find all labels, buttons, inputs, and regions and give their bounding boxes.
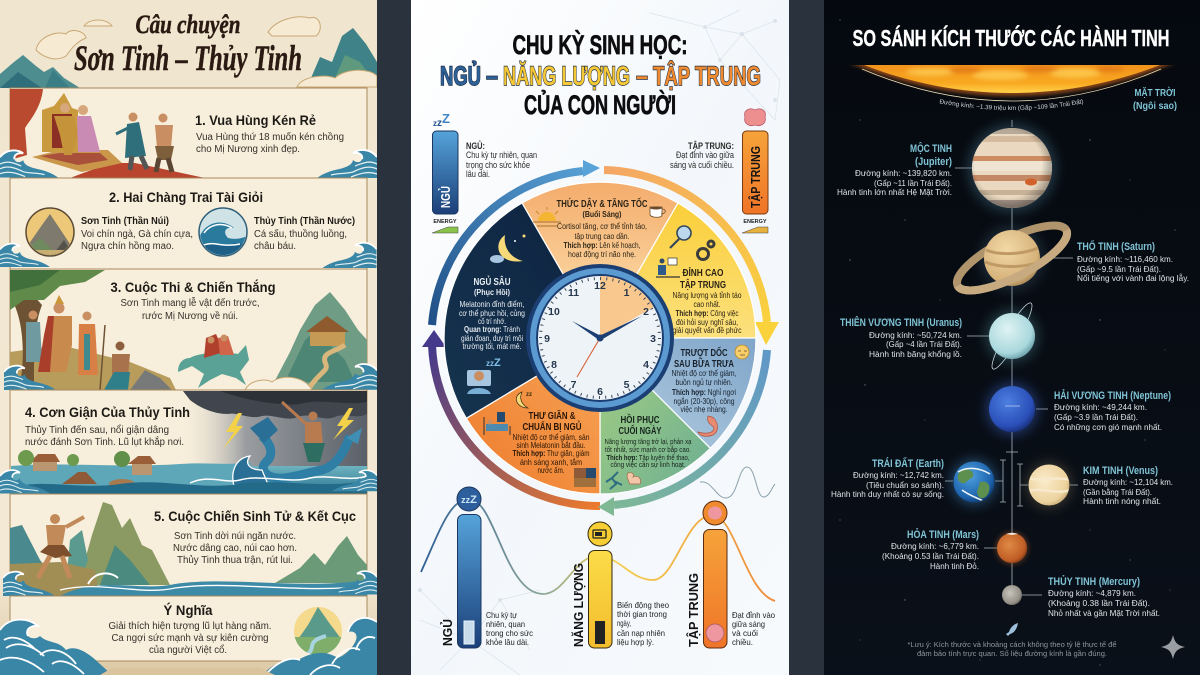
phase: afternoon dip: việc nhẹ nhàng. (680, 405, 728, 414)
vertical bar: NGỦ (432, 111, 458, 233)
sun: Đường kính: ~1.39 triệu km (Gấp ~109 lần Trái Đất) (940, 99, 1084, 112)
vertical bar: TẬP TRUNG: TẬP TRUNG (748, 146, 763, 208)
clock numbers: 6 (597, 386, 603, 398)
icon: coffee (650, 206, 665, 217)
text: Thủy Tinh: châu báu. (254, 241, 296, 252)
icon: stomach (698, 416, 717, 436)
phase: deep sleep: Quan trọng: Tránh (464, 325, 520, 334)
illustration: storm, flood and dragon (11, 391, 367, 494)
icon: bedside table (574, 468, 596, 487)
label: Mars: (Khoảng 0.53 lần Trái Đất). (882, 551, 979, 561)
title: Câu chuyện (136, 10, 240, 39)
title coloured line: – (636, 61, 648, 91)
label: Neptune: HẢI VƯƠNG TINH (Neptune) (1054, 389, 1171, 402)
column text (732, 610, 775, 647)
planet: Uranus (986, 300, 1038, 372)
label: Mercury: Đường kính: ~4,879 km. (1048, 588, 1136, 598)
stars (839, 19, 1176, 666)
label: Saturn: THỔ TINH (Saturn) (1077, 240, 1155, 253)
side note: TẬP TRUNG: TẬP TRUNG: (688, 140, 734, 151)
phase: afternoon dip: TRƯỢT DỐC (680, 345, 728, 359)
label: Jupiter: (Jupiter) (915, 156, 952, 168)
column: TẬP TRUNG: TẬP TRUNG (686, 573, 701, 647)
heading: 2. Hai Chàng Trai Tài Giỏi (109, 189, 263, 205)
row 4: Cơn Giận Của Thủy Tinh (0, 390, 377, 494)
clock numbers (544, 280, 656, 398)
clock numbers: 5 (624, 379, 630, 391)
column text: Đạt đỉnh vào (732, 610, 775, 620)
phase: deep sleep: (Phục Hồi) (474, 288, 510, 297)
icon: moon (490, 234, 526, 263)
phase: evening recovery (604, 413, 692, 469)
label: Jupiter: MỘC TINH (910, 142, 952, 155)
phase: wind down: THƯ GIÃN & (528, 409, 576, 422)
side note: NGỦ (466, 140, 537, 179)
side note: TẬP TRUNG (670, 140, 734, 170)
heading: Ý Nghĩa (164, 601, 213, 618)
cycle arrows ring (422, 160, 779, 516)
heading: 3. Cuộc Thi & Chiến Thắng (110, 278, 276, 295)
sine line top right of bottom row (700, 467, 775, 498)
clock hands (572, 316, 642, 377)
illustration: throne room (10, 89, 205, 178)
text: Sơn Tinh mang lễ vật đến trước, (120, 296, 260, 309)
title coloured line: TẬP TRUNG (653, 60, 761, 91)
icon: rocket (1006, 623, 1018, 636)
phase: evening recovery: tốt nhất, sức mạnh cơ bắp cao. (605, 445, 691, 454)
illustration: mountains and warrior (10, 502, 367, 596)
text: rước Mị Nương về núi. (142, 310, 238, 322)
vertical bar: NGỦ: zz (433, 118, 442, 129)
text: của người Việt cổ. (149, 644, 227, 656)
phase: morning: hoạt động trí não nhẹ. (568, 250, 636, 259)
phase: deep sleep: gián đoạn, duy trì môi (461, 334, 523, 343)
sun: MẶT TRỜI (1134, 86, 1176, 99)
label: Venus: Hành tinh nóng nhất. (1083, 496, 1161, 506)
phase: evening recovery: HỒI PHỤC (620, 413, 660, 426)
side note: NGỦ: Chu kỳ tự nhiên, quan (466, 150, 537, 160)
phase: morning: (Buổi Sáng) (582, 210, 622, 219)
column text: trong cho sức (486, 628, 534, 638)
footnote: *Lưu ý: Kích thước và khoảng cách không theo tỷ lệ thực tế để (908, 640, 1116, 649)
label: Uranus (840, 316, 962, 359)
title: Sơn Tinh – Thủy Tinh (74, 38, 302, 78)
label: Uranus: Đường kính: ~50,724 km. (869, 330, 962, 340)
footnote: đảm bảo tính trực quan. Số liệu đường kính là gần đúng. (917, 649, 1107, 658)
text: Sơn Tinh: Sơn Tinh (Thần Núi) (81, 215, 169, 227)
icon: magnifier (670, 226, 691, 248)
phase: peak focus: giải quyết vấn đề phức (672, 326, 742, 335)
label: Uranus: THIÊN VƯƠNG TINH (Uranus) (840, 316, 962, 329)
panel: Chu kỳ sinh học (411, 0, 789, 675)
title coloured line (440, 59, 761, 91)
label: Venus: Đường kính: ~12,104 km. (1083, 477, 1173, 487)
clock (526, 264, 674, 412)
icon: sun (533, 207, 561, 226)
clock numbers: 1 (624, 287, 630, 299)
text: Sơn Tinh: Ngựa chín hồng mao. (81, 240, 174, 252)
text: Thủy Tinh: Thủy Tinh (Thần Nước) (254, 215, 355, 227)
row 1: Vua Hùng Kén Rể (0, 88, 377, 178)
icon: Sơn Tinh mountain (26, 208, 74, 258)
side note: NGỦ: trọng cho sức khỏe (466, 160, 530, 170)
label: Neptune: (Gấp ~3.9 lần Trái Đất). (1054, 412, 1138, 422)
column text (486, 610, 534, 647)
phase: wind down: CHUẨN BỊ NGỦ (522, 420, 582, 433)
column text: khỏe lâu dài. (486, 637, 529, 647)
label: Jupiter: Hành tinh lớn nhất Hệ Mặt Trời. (837, 187, 952, 197)
phase: wind down: Nhiệt độ cơ thể giảm, sản (512, 433, 590, 442)
column text: ngày, (617, 618, 631, 628)
label: Mercury: THỦY TINH (Mercury) (1048, 575, 1140, 588)
phase: afternoon dip: buồn ngủ tự nhiên. (676, 378, 732, 387)
label: Mercury: Nhỏ nhất và gần Mặt Trời nhất. (1048, 608, 1160, 618)
label: Jupiter: (Gấp ~11 lần Trái Đất). (874, 178, 952, 188)
label: Saturn: Đường kính: ~116,460 km. (1077, 254, 1173, 264)
network background (418, 10, 780, 675)
header mountains and clouds (0, 17, 377, 88)
clock numbers: 3 (650, 333, 656, 345)
wheel text (459, 196, 742, 475)
phase: wind down: ánh sáng xanh, tắm (520, 458, 582, 467)
clock numbers: 7 (571, 379, 577, 391)
phase: wind down: Thích hợp: Thư giãn, giảm (512, 449, 590, 458)
phase: afternoon dip (672, 345, 736, 414)
icon: sparkle (1161, 635, 1185, 659)
icon: zZZ near sleeper: zzZ (486, 357, 501, 369)
pie wheel with six phases (444, 182, 756, 494)
label: Mercury (1048, 575, 1160, 618)
phase: deep sleep: trường tối, mát mẻ. (462, 342, 522, 351)
planet: Jupiter (968, 124, 1056, 212)
label: Neptune: Có những cơn gió mạnh nhất. (1054, 422, 1162, 432)
phase: peak focus: đòi hỏi suy nghĩ sâu, (676, 318, 738, 327)
column text: giữa sáng (732, 619, 765, 629)
planet: Neptune (986, 383, 1038, 435)
text: Thủy Tinh (254, 216, 355, 249)
icon: crescent: zz (526, 392, 532, 398)
panel: So sánh kích thước các hành tinh (824, 0, 1200, 675)
heading: 4. Cơn Giận Của Thủy Tinh (25, 404, 190, 420)
phase: deep sleep: cơ thể phục hồi, củng (459, 309, 525, 318)
column text: liệu hợp lý. (617, 637, 654, 647)
text: Vua Hùng thứ 18 muốn kén chồng (196, 131, 344, 143)
text (108, 621, 272, 656)
text: Sơn Tinh dời núi ngăn nước. (174, 531, 296, 542)
icon: Thủy Tinh wave (199, 208, 247, 258)
label: Mars: Hành tinh Đỏ. (930, 561, 979, 571)
icon: runner (606, 472, 622, 489)
title coloured line: – (486, 61, 498, 91)
planet: Mercury (1002, 585, 1022, 605)
column text: chiều. (732, 637, 753, 647)
clock numbers: 9 (544, 333, 550, 345)
icon: sleeping person (467, 370, 491, 394)
label: Earth: Hành tinh duy nhất có sự sống. (831, 489, 944, 499)
clock numbers: 2 (643, 306, 649, 318)
phase: wind down: nước ấm. (538, 466, 564, 475)
text: nước đánh Sơn Tinh. Lũ lụt khắp nơi. (25, 435, 184, 448)
title (74, 10, 302, 78)
phase: evening recovery: Năng lượng tăng trở lại, phản xạ (604, 437, 692, 446)
heading: 5. Cuộc Chiến Sinh Tử & Kết Cục (154, 508, 356, 524)
column: NGỦ: NGỦ (440, 619, 455, 646)
label: Neptune: Đường kính: ~49,244 km. (1054, 402, 1147, 412)
text (196, 131, 344, 155)
vertical bar: TẬP TRUNG (742, 109, 768, 233)
label: Earth: (Tiêu chuẩn so sánh). (866, 480, 944, 490)
phase: deep sleep (459, 275, 525, 351)
column: NĂNG LƯỢNG (571, 522, 669, 648)
phase: deep sleep: NGỦ SÂU (474, 275, 510, 288)
icon: crescent (516, 392, 532, 408)
phase: evening recovery: Thích hợp: Tập luyện thể thao, (606, 453, 690, 462)
text (25, 424, 184, 448)
column text (617, 600, 669, 647)
label: Uranus: Hành tinh băng khổng lồ. (869, 349, 962, 359)
column: TẬP TRUNG (686, 501, 775, 648)
column text: thời gian trong (617, 609, 667, 619)
label: Saturn: (Gấp ~9.5 lần Trái Đất). (1077, 264, 1161, 274)
phase: peak focus: Thích hợp: Công việc (676, 309, 738, 318)
phase: afternoon dip: Nhiệt độ cơ thể giảm, (672, 369, 736, 378)
phase: morning: Cortisol tăng, cơ thể tỉnh táo, (557, 222, 647, 231)
title coloured line: NGỦ (440, 59, 481, 91)
text: Nước dâng cao, núi cao hơn. (173, 543, 297, 554)
text: Sơn Tinh (81, 215, 193, 252)
title (440, 29, 761, 120)
side note: TẬP TRUNG: sáng và cuối chiều. (670, 160, 734, 170)
label: Saturn (1077, 240, 1189, 283)
phase: evening recovery: CUỐI NGÀY (618, 423, 662, 437)
icon: muscle arm (627, 473, 641, 484)
phase: deep sleep: Melatonin đỉnh điểm, (460, 300, 524, 309)
phase: peak focus: ĐỈNH CAO (682, 266, 724, 279)
text (173, 531, 297, 566)
text (120, 296, 260, 322)
label: Mars: Đường kính: ~6,779 km. (891, 541, 979, 551)
side note: NGỦ: NGỦ: (466, 140, 485, 151)
label: Mars (882, 528, 979, 571)
heading: 1. Vua Hùng Kén Rẻ (195, 112, 316, 128)
icon: person at desk (656, 258, 680, 277)
waves (0, 618, 377, 675)
planet: Venus (1026, 462, 1072, 508)
column text: cần nạp nhiên (617, 628, 665, 638)
row 2: Hai Chàng Trai Tài Giỏi (0, 178, 376, 269)
text: Thủy Tinh thua trận, rút lui. (177, 554, 293, 566)
icon: sleepy face (735, 345, 749, 359)
text: Thủy Tinh đến sau, nổi giận dâng (25, 424, 169, 436)
side note: NGỦ: lâu dài. (466, 169, 490, 179)
column text: nhiên, quan (486, 619, 525, 629)
vertical bar: TẬP TRUNG: ENERGY (743, 219, 767, 225)
phase: afternoon dip: Thích hợp: Nghỉ ngơi (672, 388, 736, 397)
sun: (Ngôi sao) (1133, 100, 1177, 112)
row 3: Cuộc Thi & Chiến Thắng (4, 269, 377, 390)
label: Jupiter (837, 142, 952, 197)
footnote (908, 640, 1116, 658)
phase: peak focus (672, 266, 742, 335)
label: Earth: TRÁI ĐẤT (Earth) (872, 457, 944, 470)
phase: morning: THỨC DẬY & TĂNG TỐC (556, 196, 648, 210)
text: Giải thích hiện tượng lũ lụt hàng năm. (108, 621, 272, 632)
vertical bar: NGỦ: ENERGY (433, 219, 457, 225)
title: CHU KỲ SINH HỌC: (512, 29, 688, 60)
phase: morning: tập trung cao dần. (574, 232, 630, 241)
vertical bar: NGỦ: Z (442, 111, 450, 126)
label: Uranus: (Gấp ~4 lần Trái Đất). (886, 339, 962, 349)
phase: peak focus: cao nhất. (694, 300, 720, 309)
side note: TẬP TRUNG: Đạt đỉnh vào giữa (676, 150, 734, 160)
text: Thủy Tinh: Cá sấu, thuồng luồng, (254, 228, 347, 240)
phase: evening recovery: công việc cần sự linh hoạt. (610, 460, 686, 469)
row 6: Ý Nghĩa (0, 596, 377, 675)
row 5: Cuộc Chiến Sinh Tử & Kết Cục (3, 494, 377, 596)
clock numbers: 8 (551, 359, 557, 371)
column: NGỦ: zzZ (461, 494, 477, 506)
vertical bar: NGỦ: NGỦ (438, 186, 453, 208)
label: Mercury: (Khoảng 0.38 lần Trái Đất). (1048, 598, 1150, 608)
label: Venus: KIM TINH (Venus) (1083, 465, 1158, 477)
text: cho Mị Nương xinh đẹp. (196, 144, 300, 155)
planet: Saturn (949, 213, 1075, 303)
icons on wheel (467, 206, 749, 489)
column text: và cuối (732, 628, 758, 638)
icon: gears (698, 241, 714, 260)
text: Ca ngợi sức mạnh và sự kiên cường (112, 633, 268, 644)
label: Earth (831, 457, 944, 499)
title coloured line: NĂNG LƯỢNG (503, 60, 630, 91)
icon: bed (484, 412, 510, 435)
column text: Biến động theo (617, 600, 669, 610)
planet: Mars (995, 531, 1029, 565)
phase: wind down (512, 409, 590, 475)
label: Venus (1083, 465, 1173, 506)
phase: afternoon dip: SAU BỮA TRƯA (674, 357, 734, 370)
phase: morning: Thích hợp: Lên kế hoạch, (564, 241, 640, 250)
title: CỦA CON NGƯỜI (524, 88, 676, 120)
sun (848, 65, 1177, 112)
phase: deep sleep: cố trí nhớ. (478, 317, 506, 326)
clock numbers: 4 (643, 359, 649, 371)
illustration: contest scene (10, 270, 367, 390)
planet: Earth (951, 459, 997, 505)
rhythm curve (421, 499, 775, 601)
phase: afternoon dip: ngắn (20-30p), công (674, 397, 734, 406)
label: Venus: (Gần bằng Trái Đất). (1083, 487, 1152, 497)
label: Mars: HỎA TINH (Mars) (907, 528, 979, 541)
phase: peak focus: TẬP TRUNG (680, 278, 726, 291)
column text: Chu kỳ tự (486, 610, 517, 620)
label: Jupiter: Đường kính: ~139,820 km. (855, 168, 952, 178)
label: Saturn: Nổi tiếng với vành đai lộng lẫy. (1077, 273, 1189, 283)
column: NGỦ (440, 487, 534, 648)
clock numbers: 11 (568, 287, 579, 299)
clock numbers: 12 (594, 280, 606, 292)
phase: wind down: sinh Melatonin bắt đầu. (516, 441, 586, 450)
phase: peak focus: Năng lượng và tỉnh táo (672, 291, 742, 300)
phase: morning (556, 196, 648, 259)
label: Neptune (1054, 389, 1171, 432)
label: Earth: Đường kính: ~12,742 km. (853, 470, 944, 480)
text: Sơn Tinh: Voi chín ngà, Gà chín cựa, (81, 229, 193, 240)
panel: Sơn Tinh – Thủy Tinh story (0, 0, 377, 675)
clock numbers: 10 (548, 306, 560, 318)
icon: landscape circle (294, 607, 342, 657)
axis lines (945, 120, 1078, 595)
column: NĂNG LƯỢNG: NĂNG LƯỢNG (571, 563, 586, 647)
